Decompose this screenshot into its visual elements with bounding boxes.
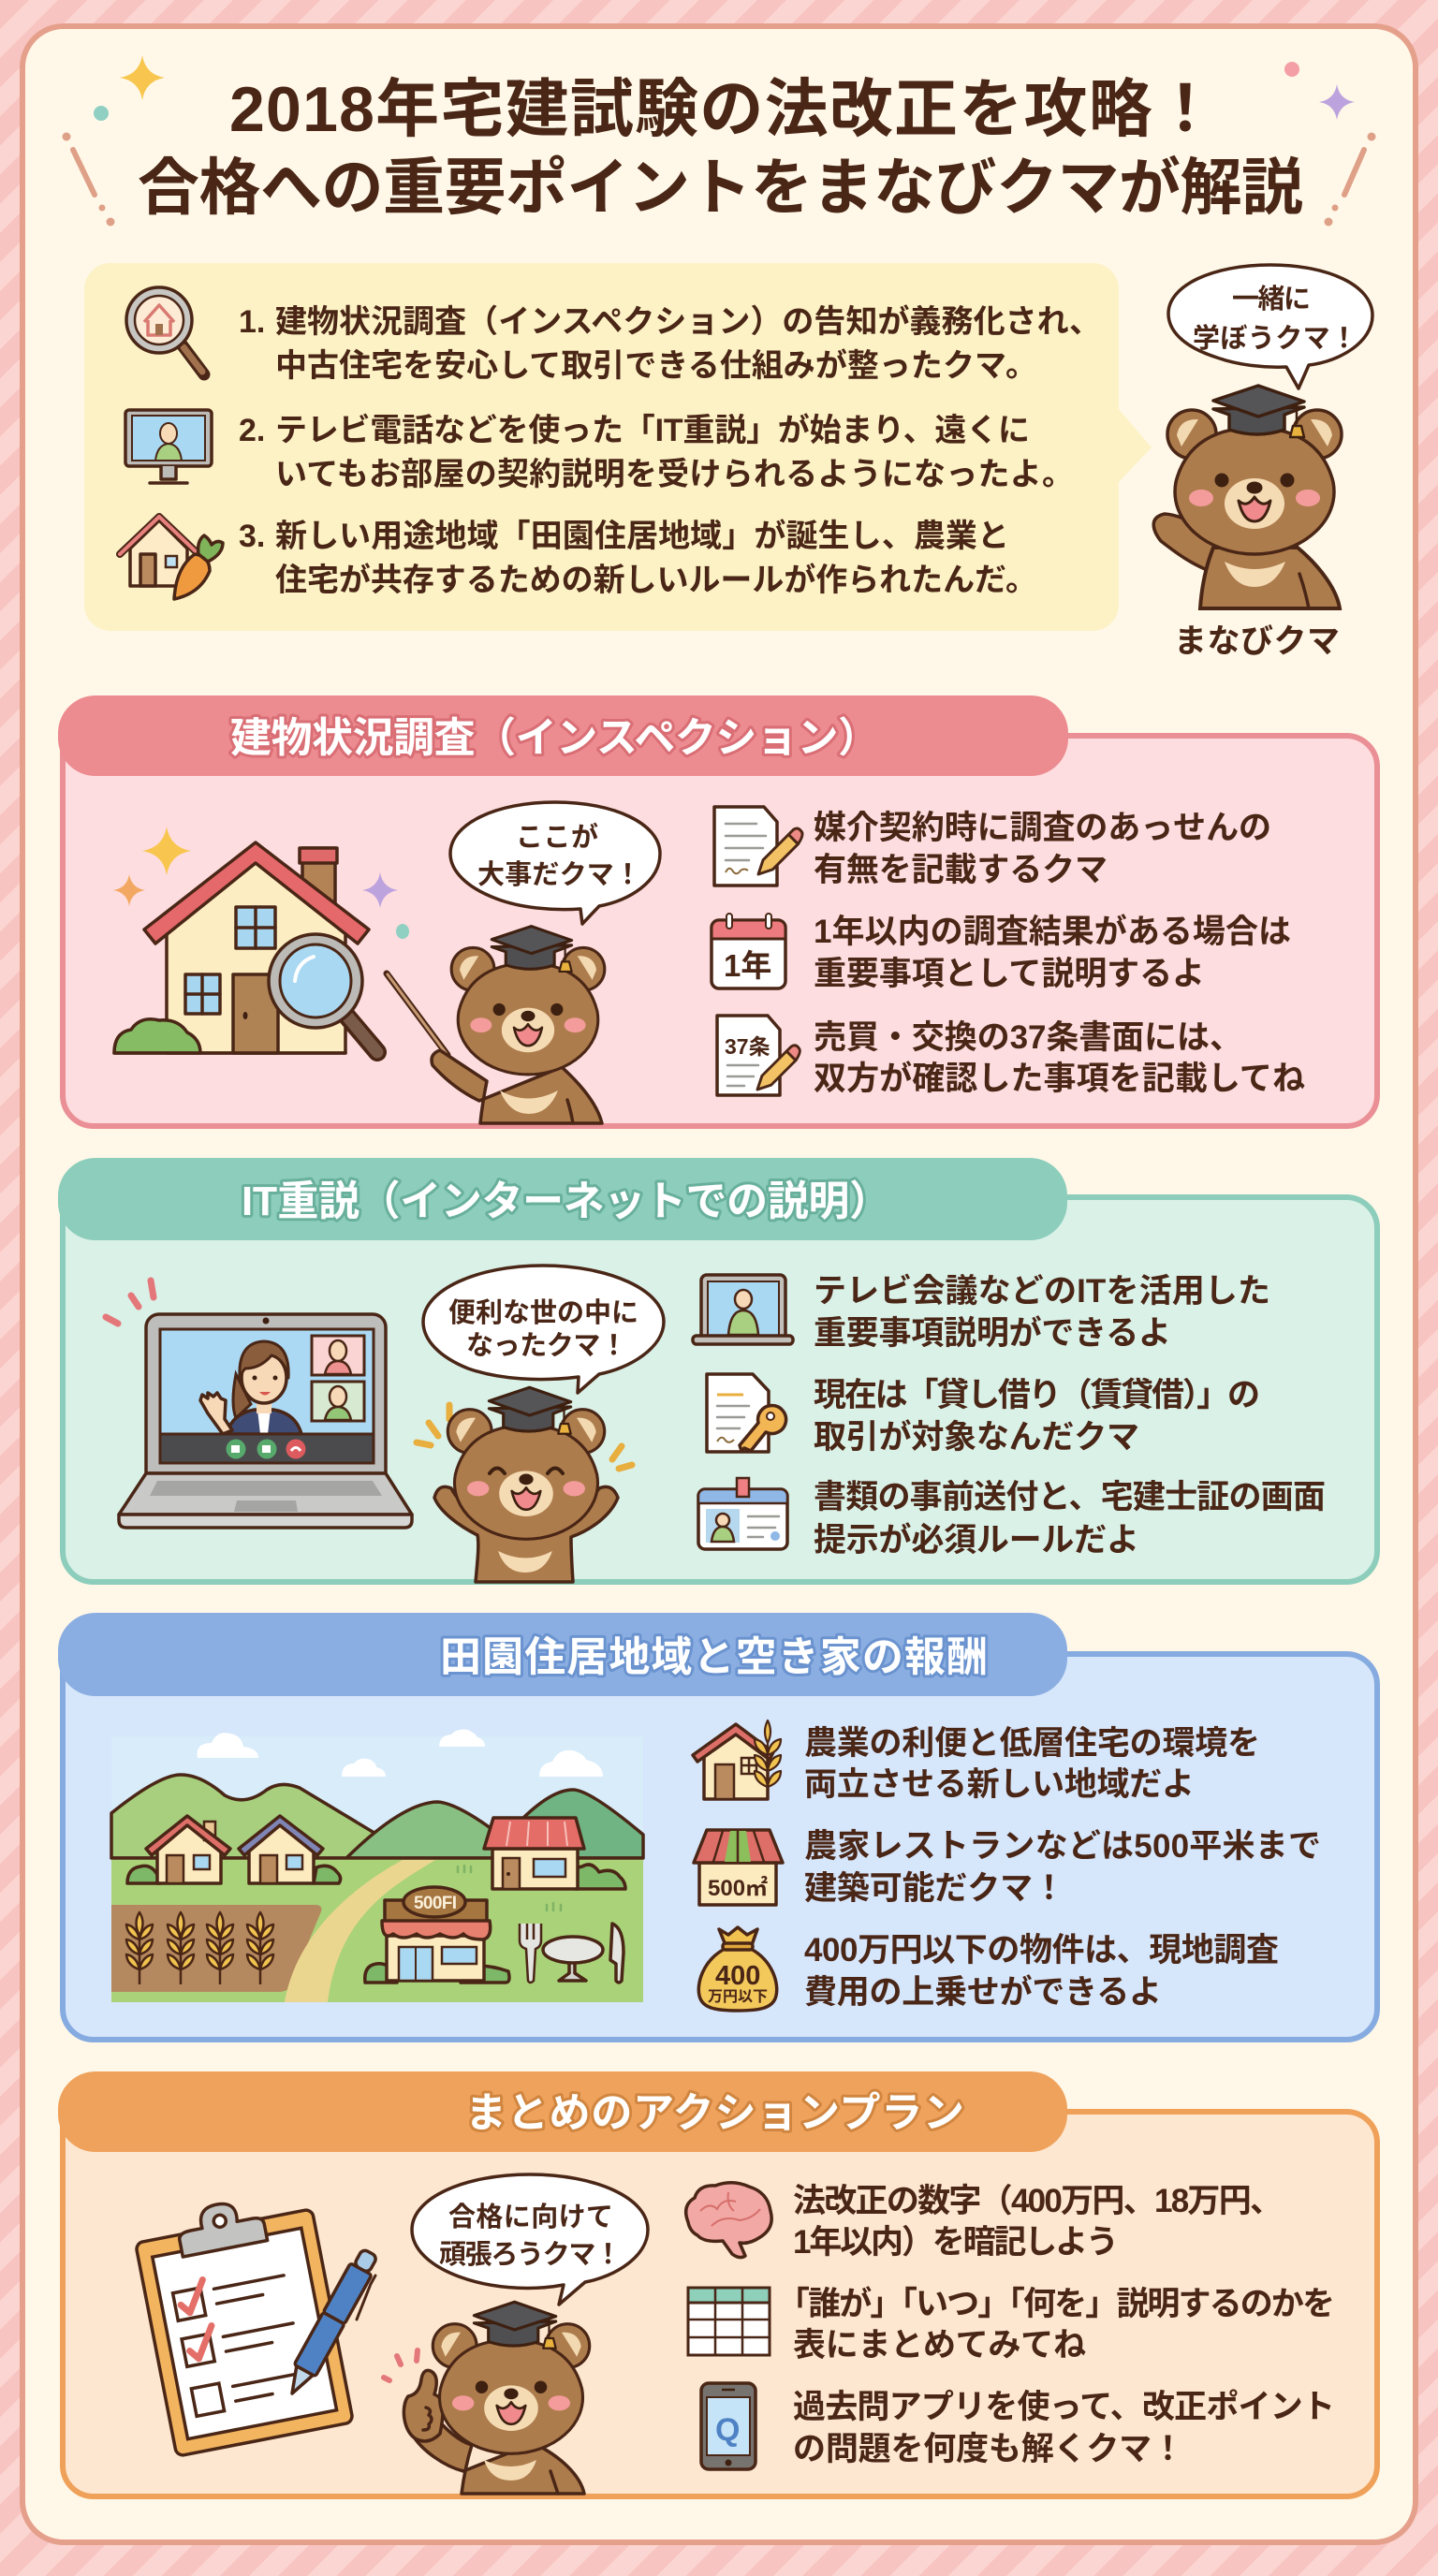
item text: action 3: の問題を何度も解くクマ！ <box>793 2431 1184 2467</box>
icon: phone quiz app <box>701 2383 756 2469</box>
speech bubble: important <box>450 802 660 924</box>
item text: inspection 2: 1年以内の調査結果がある場合は <box>814 914 1291 950</box>
speech bubble: intro: 一緒に <box>1232 284 1311 315</box>
item text: rural 3: 費用の上乗せができるよ <box>804 1974 1162 2011</box>
panel: intro summary <box>84 263 1152 631</box>
item text: action 3 <box>793 2389 1335 2467</box>
label: manabi bear: まなびクマ <box>1174 623 1340 660</box>
item text: IT 3: 提示が必須ルールだよ <box>814 1522 1139 1559</box>
item text: rural 2: 建築可能だクマ！ <box>804 1870 1065 1907</box>
section header: 田園住居地域と空き家の報酬 <box>440 1634 988 1680</box>
speech bubble: convenient <box>423 1266 664 1393</box>
title <box>138 74 1303 222</box>
title: 合格への重要ポイントをまなびクマが解説 <box>138 153 1303 222</box>
character: manabi bear waving <box>1153 386 1342 608</box>
icon: table <box>688 2288 770 2355</box>
item text: IT 2 <box>814 1377 1260 1456</box>
item text: rural 2: 農家レストランなどは500平米まで <box>804 1828 1321 1865</box>
summary text 1: 中古住宅を安心して取引できる仕組みが整ったクマ。 <box>275 347 1037 384</box>
panel: action plan <box>58 2071 1377 2496</box>
icon: calendar 1 year <box>712 914 785 988</box>
icon: article 37 document <box>717 1016 800 1095</box>
character: bear thumbs up <box>384 2302 590 2494</box>
item text: inspection 3: 双方が確認した事項を記載してね <box>814 1061 1305 1097</box>
panel body <box>63 736 1377 1126</box>
panel body <box>63 1197 1377 1582</box>
item text: inspection 3 <box>814 1019 1305 1097</box>
icon: document with key <box>707 1374 786 1452</box>
item text: rural 1: 両立させる新しい地域だよ <box>804 1766 1195 1803</box>
panel: rural residential <box>58 1613 1377 2040</box>
speech bubble: intro <box>1168 265 1372 388</box>
item text: IT 1: 重要事項説明ができるよ <box>814 1315 1171 1352</box>
speech bubble: important: ここが <box>516 821 598 853</box>
panel body <box>63 1654 1377 2040</box>
speech bubble: good luck: 頑張ろうクマ！ <box>439 2240 622 2270</box>
section header <box>58 1158 1067 1240</box>
panel: inspection <box>58 695 1377 1126</box>
icon: house with carrot <box>120 517 223 599</box>
section header: まとめのアクションプラン <box>465 2090 964 2136</box>
illustration: house with magnifier <box>113 827 409 1053</box>
item text: inspection 1 <box>814 810 1271 888</box>
icon: monitor with person <box>125 410 212 483</box>
speech bubble: good luck: 合格に向けて <box>448 2202 613 2232</box>
item text: IT 1: テレビ会議などのITを活用した <box>814 1273 1270 1310</box>
item text: action 1: 1年以内）を暗記しよう <box>793 2224 1119 2261</box>
icon: farm store 500 <box>694 1830 783 1905</box>
item text: rural 1 <box>804 1725 1260 1803</box>
speech bubble: important: 大事だクマ！ <box>477 859 641 890</box>
summary text 1 <box>239 303 1101 384</box>
icon: money bag 400: 万円以下 <box>708 1989 768 2005</box>
item text: inspection 1: 媒介契約時に調査のあっせんの <box>814 810 1271 846</box>
speech bubble: intro: 学ぼうクマ！ <box>1193 323 1357 354</box>
summary text 3: 3. <box>239 519 265 554</box>
illustration: video call laptop <box>106 1281 412 1528</box>
icon: money bag 400 <box>698 1927 777 2011</box>
icon: farm store 500: 500㎡ <box>708 1875 768 1901</box>
item text: rural 1: 農業の利便と低層住宅の環境を <box>804 1725 1260 1762</box>
summary background with pointer <box>84 263 1152 631</box>
item text: action 2: 表にまとめてみてね <box>793 2327 1086 2364</box>
panel body <box>63 2112 1377 2496</box>
panel: IT explanation <box>58 1158 1377 1582</box>
icon: calendar 1 year: 1年 <box>724 948 771 983</box>
illustration: rural scene: 500FI <box>414 1894 457 1913</box>
speech bubble: convenient: なったクマ！ <box>466 1331 627 1361</box>
item text: inspection 3: 売買・交換の37条書面には、 <box>814 1019 1242 1056</box>
summary text 2 <box>239 412 1074 492</box>
summary text 2: いてもお部屋の契約説明を受けられるようになったよ。 <box>275 457 1074 492</box>
summary text 3: 住宅が共存するための新しいルールが作られたんだ。 <box>275 562 1037 598</box>
summary text 2: 2. <box>239 413 265 448</box>
item text: action 3: 過去問アプリを使って、改正ポイント <box>793 2389 1335 2425</box>
summary text 1: 1. <box>239 304 265 340</box>
item text: IT 3 <box>814 1479 1326 1559</box>
item text: inspection 1: 有無を記載するクマ <box>814 852 1108 888</box>
icon: magnifier house <box>126 287 204 374</box>
summary text 2: テレビ電話などを使った「IT重説」が始まり、遠くに <box>275 412 1030 448</box>
decorations around title <box>62 55 1376 227</box>
character: bear with pointer <box>387 927 605 1123</box>
item text: rural 2 <box>804 1828 1321 1907</box>
item text: action 2 <box>777 2286 1335 2364</box>
icon: article 37 document: 37条 <box>725 1034 770 1059</box>
illustration: rural scene <box>111 1730 643 2002</box>
section header: IT重説（インターネットでの説明） <box>242 1178 890 1224</box>
item text: IT 1 <box>814 1273 1270 1352</box>
summary text 3 <box>239 518 1037 598</box>
item text: action 1 <box>793 2183 1283 2261</box>
item text: rural 3 <box>804 1932 1279 2011</box>
icon: small laptop <box>693 1275 793 1344</box>
item text: inspection 2 <box>814 914 1291 992</box>
summary text 3: 新しい用途地域「田園住居地域」が誕生し、農業と <box>275 518 1009 554</box>
icon: house and wheat <box>693 1720 781 1799</box>
summary text 1: 建物状況調査（インスペクション）の告知が義務化され、 <box>275 303 1101 340</box>
item text: IT 2: 取引が対象なんだクマ <box>814 1419 1139 1456</box>
illustration: checklist clipboard <box>131 2187 381 2456</box>
title: 2018年宅建試験の法改正を攻略！ <box>229 74 1217 145</box>
section header <box>58 1613 1067 1696</box>
section header <box>58 695 1068 776</box>
speech bubble: convenient: 便利な世の中に <box>448 1297 638 1328</box>
item text: action 1: 法改正の数字（400万円、18万円、 <box>793 2183 1283 2219</box>
item text: action 2: 「誰が」「いつ」「何を」説明するのかを <box>777 2286 1335 2322</box>
item text: inspection 2: 重要事項として説明するよ <box>814 956 1205 992</box>
icon: license card <box>698 1478 787 1549</box>
speech bubble: good luck <box>412 2174 648 2305</box>
item text: IT 3: 書類の事前送付と、宅建士証の画面 <box>814 1479 1326 1515</box>
icon: brain <box>686 2183 771 2258</box>
section header: 建物状況調査（インスペクション） <box>230 715 879 761</box>
icon: phone quiz app: Q <box>715 2412 740 2448</box>
section header <box>58 2071 1067 2152</box>
item text: rural 3: 400万円以下の物件は、現地調査 <box>804 1932 1279 1969</box>
icon: contract document <box>714 807 802 886</box>
character: bear cheering <box>417 1387 632 1582</box>
icon: money bag 400: 400 <box>715 1961 760 1991</box>
item text: IT 2: 現在は「貸し借り（賃貸借）」の <box>814 1377 1260 1413</box>
